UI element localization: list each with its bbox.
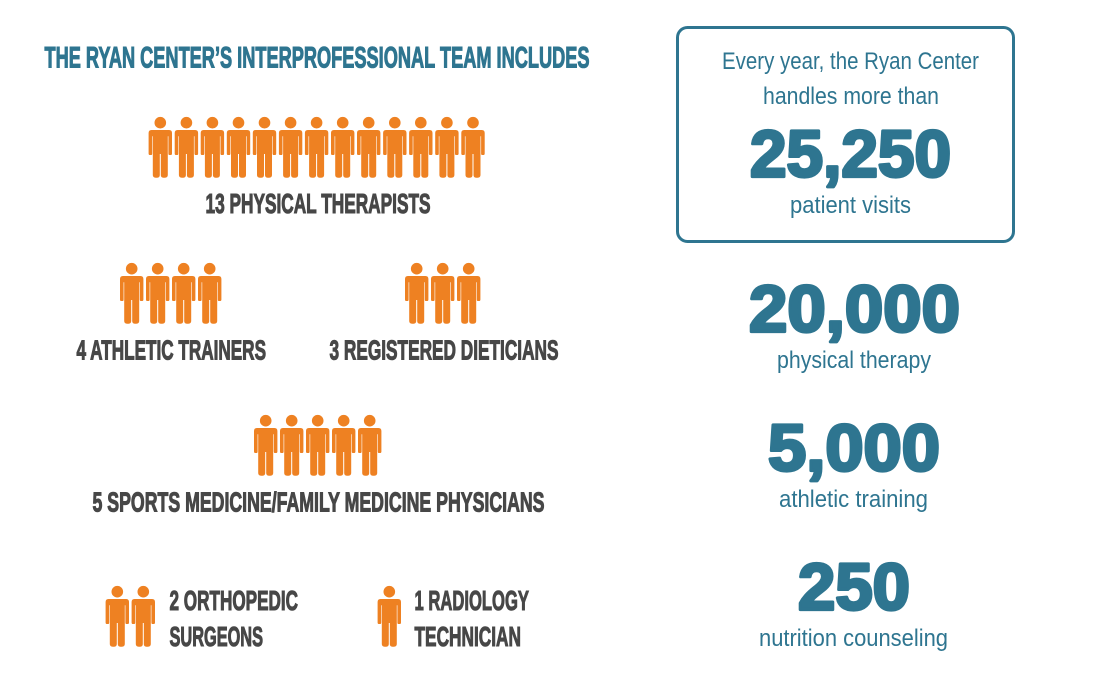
number: 5,000: 5,000: [768, 410, 940, 484]
number: 25,250: 25,250: [750, 116, 951, 190]
icons: 2 people: [106, 586, 155, 647]
stat: athletic training: [768, 410, 940, 513]
group: 13 physical therapists: [149, 117, 485, 219]
stat: physical therapy: [749, 272, 960, 374]
group: 3 registered dieticians: [330, 263, 558, 366]
label: 3 REGISTERED DIETICIANS: [330, 334, 558, 366]
group: 1 radiology technician: [378, 585, 529, 652]
label: 13 PHYSICAL THERAPISTS: [206, 188, 430, 219]
panel border: [678, 28, 1014, 242]
caption: patient visits: [790, 192, 911, 219]
icon: person: [378, 586, 401, 647]
group: 4 athletic trainers: [76, 263, 266, 366]
title: THE RYAN CENTER’S INTERPROFESSIONAL TEAM INCLUDES: [44, 42, 590, 74]
caption: athletic training: [779, 486, 928, 513]
intro text: Every year, the Ryan Center: [722, 48, 979, 75]
caption: physical therapy: [777, 347, 931, 374]
number: 20,000: 20,000: [749, 272, 960, 346]
intro text: handles more than: [763, 83, 939, 110]
icons: 5 people: [254, 415, 381, 476]
label: SURGEONS: [170, 621, 263, 652]
icons: 4 people: [120, 263, 221, 324]
number: 250: 250: [798, 550, 910, 624]
caption: nutrition counseling: [759, 625, 948, 652]
icons: 3 people: [405, 263, 480, 324]
label: TECHNICIAN: [414, 621, 521, 652]
stat: nutrition counseling: [759, 550, 948, 652]
panel: total patient visits: [678, 28, 1014, 242]
label: 2 ORTHOPEDIC: [170, 585, 298, 616]
group: 2 orthopedic surgeons: [106, 585, 298, 652]
label: 1 RADIOLOGY: [414, 585, 529, 616]
icons: 13 people: [149, 117, 485, 178]
group: 5 physicians: [92, 415, 544, 518]
label: 5 SPORTS MEDICINE/FAMILY MEDICINE PHYSICIANS: [92, 486, 544, 518]
label: 4 ATHLETIC TRAINERS: [76, 334, 266, 366]
